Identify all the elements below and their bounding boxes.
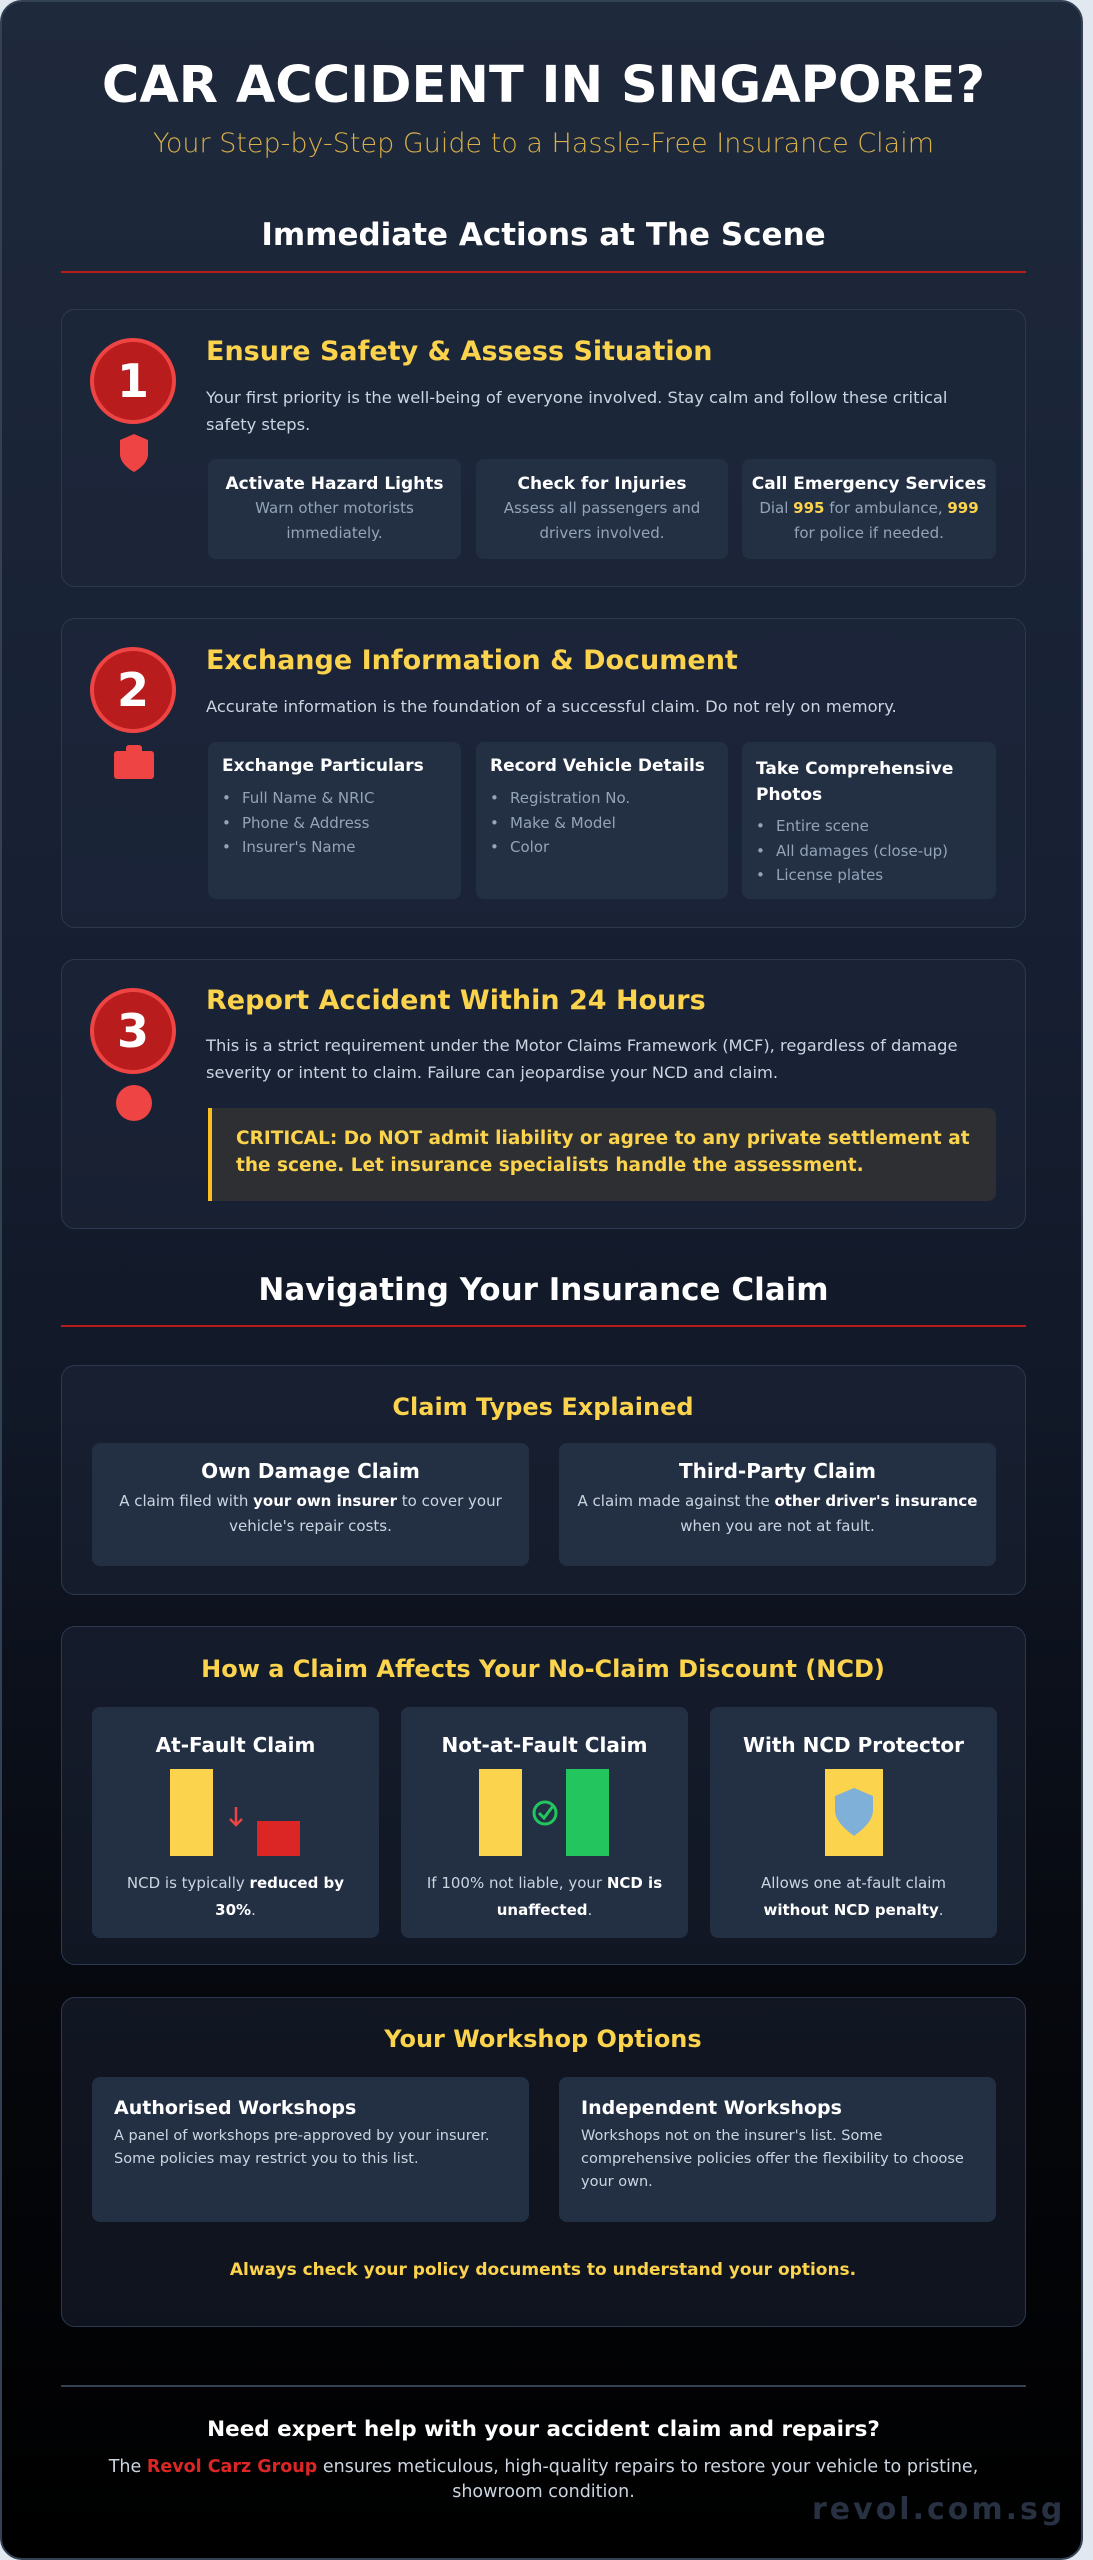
panel: NCD [61,1626,1026,1965]
box: emergency: Call Emergency Services [752,474,986,494]
chart: not-at-fault bars [479,1769,609,1856]
callout: critical [208,1108,996,1201]
box: hazard lights: immediately. [286,524,383,542]
box: particulars: Phone & Address [242,814,369,832]
box: particulars [208,742,461,899]
box: not-at-fault: If 100% not liable, your NCD is [427,1874,662,1892]
box: vehicle [476,742,728,899]
box: not-at-fault: unaffected. [497,1901,592,1919]
box: third party: when you are not at fault. [680,1517,875,1535]
box: at-fault: At-Fault Claim [156,1733,315,1757]
box: emergency: Dial 995 for ambulance, 999 [759,499,979,517]
box: own damage: Own Damage Claim [201,1459,420,1483]
box: at-fault: NCD is typically reduced by [127,1874,344,1892]
box: authorised: A panel of workshops pre-approved by your insurer. Some policies may restrict you to this list. [114,2128,490,2167]
box: injuries: drivers involved. [539,524,664,542]
step 2 text: Accurate information is the foundation of a successful claim. Do not rely on memory. [206,697,897,716]
title: CAR ACCIDENT IN SINGAPORE? [102,56,985,115]
step 3 text: This is a strict requirement under the Motor Claims Framework (MCF), regardless of damage severity or intent to claim. Failure can jeopardise your NCD and claim. [206,1036,958,1082]
icon: shield [120,434,148,472]
subtitle: Your Step-by-Step Guide to a Hassle-Free Insurance Claim [153,128,934,159]
step 2 number [90,647,176,733]
box: photos: Take Comprehensive Photos [756,759,953,805]
icon: dot [116,1085,152,1121]
box: particulars: Exchange Particulars [222,756,424,776]
heading: immediate actions: Immediate Actions at The Scene [261,217,826,253]
box: hazard lights: Warn other motorists [255,499,414,517]
box: not-at-fault: Not-at-Fault Claim [441,1733,648,1757]
note: Always check your policy documents to understand your options. [230,2260,856,2280]
box: hazard lights: Activate Hazard Lights [225,474,444,494]
box: authorised [92,2077,529,2222]
step 2 heading: Exchange Information & Document [206,645,738,676]
step 2 boxes [208,742,996,899]
box: at-fault [92,1707,379,1938]
panel: step 3 [61,959,1026,1229]
step 1 heading: Ensure Safety & Assess Situation [206,336,712,367]
callout: critical: CRITICAL: Do NOT admit liability or agree to any private settlement at the scene. Let insurance specialists handle the assessment. [236,1128,970,1176]
step 1 text: Your first priority is the well-being of everyone involved. Stay calm and follow these critical safety steps. [206,388,947,434]
box: injuries: Assess all passengers and [504,499,700,517]
box: hazard lights [208,459,461,559]
box: photos: License plates [776,866,883,884]
footer heading: Need expert help with your accident claim and repairs? [207,2417,880,2442]
box: NCD protector [710,1707,997,1938]
watermark: revol.com.sg [812,2492,1065,2527]
panel: workshops [61,1997,1026,2327]
box: injuries [476,459,728,559]
panel: step 1 [61,309,1026,587]
box: emergency: for police if needed. [794,524,944,542]
box: own damage [92,1443,529,1566]
step 1 boxes [208,459,996,559]
box: third party [559,1443,996,1566]
workshop title: Your Workshop Options [384,2025,702,2053]
box: independent: Independent Workshops [581,2097,842,2119]
heading: navigating: Navigating Your Insurance Claim [258,1272,829,1308]
claim types title: Claim Types Explained [392,1393,694,1421]
box: own damage: A claim filed with your own insurer to cover your [119,1492,502,1510]
footer text: The Revol Carz Group ensures meticulous, high-quality repairs to restore your vehicle to pristine, showroom condition. [109,2457,978,2502]
box: third party: Third-Party Claim [679,1459,876,1483]
chart: at-fault bars [170,1769,300,1856]
box: photos: Entire scene [776,817,869,835]
box: authorised: Authorised Workshops [114,2097,356,2119]
box: particulars: Insurer's Name [242,838,355,856]
box: independent [559,2077,996,2222]
step 3 number: 3 [117,1004,149,1058]
box: particulars: Full Name & NRIC [242,789,374,807]
box: vehicle: Color [510,838,549,856]
box: own damage: vehicle's repair costs. [229,1517,392,1535]
box: photos: All damages (close-up) [776,842,948,860]
box: NCD protector: Allows one at-fault claim [761,1874,946,1892]
step 2 number: 2 [117,663,149,717]
step 1 number: 1 [117,354,149,408]
box: vehicle: Make & Model [510,814,616,832]
box: vehicle: Registration No. [510,789,630,807]
panel: claim types [61,1365,1026,1595]
icon: camera [114,745,154,779]
icon: shield on bar [825,1769,883,1856]
box: NCD protector: With NCD Protector [743,1733,964,1757]
box: independent: Workshops not on the insurer's list. Some comprehensive policies offer the flexibility to choose your own. [581,2128,964,2190]
box: vehicle: Record Vehicle Details [490,756,705,776]
box: NCD protector: without NCD penalty. [763,1901,944,1919]
box: photos [742,742,996,899]
box: injuries: Check for Injuries [517,474,686,494]
box: third party: A claim made against the other driver's insurance [578,1492,977,1510]
box: not-at-fault [401,1707,688,1938]
NCD title: How a Claim Affects Your No-Claim Discount (NCD) [201,1655,885,1683]
box: emergency [742,459,996,559]
step 3 number [90,988,176,1074]
step 3 heading: Report Accident Within 24 Hours [206,985,706,1016]
panel: step 2 [61,618,1026,928]
box: at-fault: 30%. [215,1901,256,1919]
step 1 number [90,338,176,424]
